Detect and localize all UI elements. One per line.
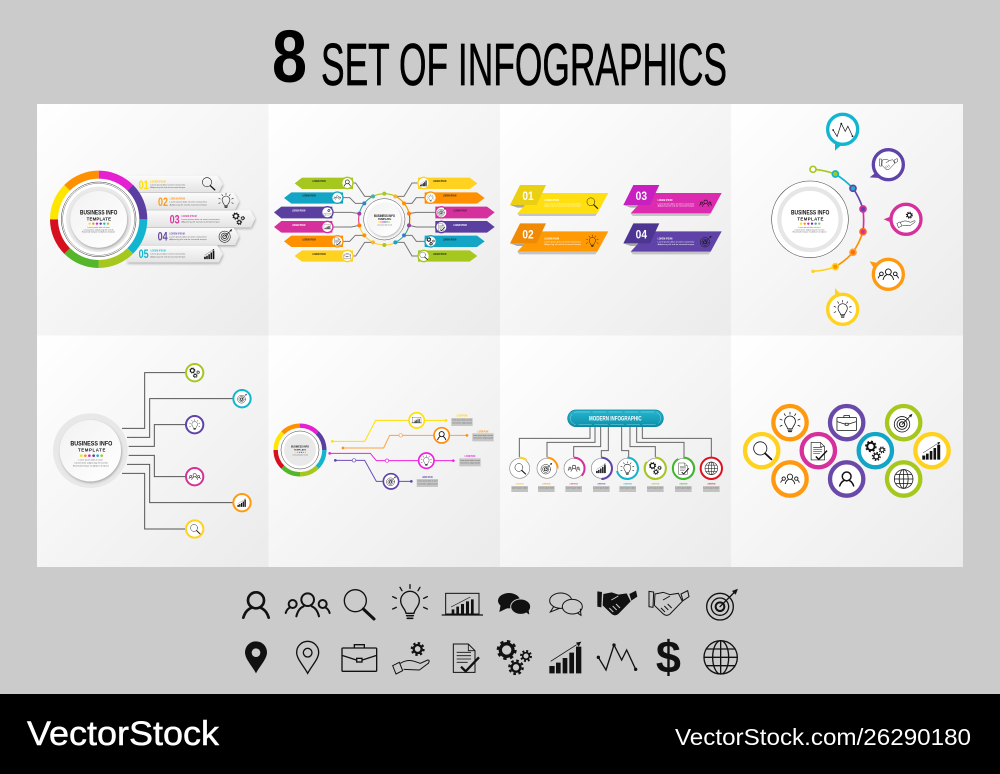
ribbon 02: 02: [522, 227, 534, 241]
node 5 bulb: Lorem ipsum dolor: [620, 487, 636, 490]
ribbon 01: 01: [522, 189, 534, 203]
circle: group: [773, 462, 807, 496]
tab 02: Adipiscing elit sed do eiusmod tempor: [170, 203, 207, 206]
ribbon 04: Lorem ipsum dolor sit amet consectetur: [658, 241, 695, 244]
tab 02: 02: [158, 196, 168, 209]
circle: search: [745, 434, 778, 467]
circle: bars: [915, 434, 949, 467]
node 6 gears: Lorem ipsum dolor: [648, 487, 663, 490]
icon: globe: [704, 641, 737, 674]
tab 05: 05: [139, 248, 149, 261]
tab 02: LOREM IPSUM: [170, 197, 186, 201]
node 1 search: LOREM IPSUM: [516, 484, 524, 486]
node 7 document: [673, 458, 694, 492]
right arrow labels: LOREM IPSUM: [433, 179, 447, 183]
bubble: group: [870, 259, 903, 289]
central hub: Lorem ipsum dolor sit amet: [377, 224, 392, 227]
bubble: zigzag: [828, 114, 858, 151]
title: 8: [272, 15, 307, 98]
tab 03: Lorem ipsum dolor sit amet consectetur: [181, 218, 220, 221]
central badge: TEMPLATE: [78, 447, 105, 452]
icon: lightbulb: [393, 585, 427, 618]
center circle: Lorem ipsum dolor sit amet: [798, 226, 821, 229]
tab 04: LOREM IPSUM: [169, 231, 185, 235]
tab 04: 04: [158, 231, 168, 244]
tab 05: LOREM IPSUM: [150, 249, 166, 253]
node 3 group: [564, 458, 585, 492]
center circle: [772, 181, 848, 258]
right arrow labels: LOREM IPSUM: [453, 208, 467, 212]
node 6 gears: [645, 458, 666, 492]
central badge: Lorem ipsum dolor sit amet: [88, 226, 110, 229]
ribbon 04: 04: [636, 227, 647, 241]
route: orange: [342, 428, 494, 449]
ribbon 01: Adipiscing elit sed do eiusmod tempor: [544, 205, 581, 208]
ribbon 01: [510, 185, 608, 216]
tab 01: [127, 176, 223, 192]
panel: honeycomb of icon circles: [731, 336, 963, 567]
tab 04: Adipiscing elit sed do eiusmod tempor: [169, 238, 207, 241]
ring badge: [266, 416, 334, 484]
tab 04: [127, 228, 239, 245]
ribbon 04: LOREM IPSUM: [658, 236, 673, 240]
panel: hub with twelve arrow labels: [268, 104, 500, 336]
panel: circular ring with five tabs: [35, 104, 268, 336]
central hub: [357, 192, 411, 247]
right arrow labels: LOREM IPSUM: [443, 237, 457, 241]
node 8 globe: Lorem ipsum dolor: [704, 487, 719, 490]
left arrow labels: LOREM IPSUM: [302, 194, 316, 198]
icon: dollar: $: [656, 632, 681, 683]
panel: modern infographic org chart: [500, 336, 732, 567]
icon: target: [707, 589, 738, 620]
icon: gears: [498, 641, 531, 674]
central badge: Consectetur adipiscing elit sed do: [74, 461, 109, 464]
ribbon 02: Lorem ipsum dolor sit amet consectetur: [544, 241, 581, 244]
ring badge: BUSINESS INFO: [291, 444, 310, 448]
route: yellow: Lorem ipsum dolor sit amet: [452, 419, 472, 422]
left arrow labels: LOREM IPSUM: [292, 223, 306, 227]
route: magenta: LOREM IPSUM: [465, 456, 475, 458]
ribbon 02: Adipiscing elit sed do eiusmod tempor: [544, 243, 581, 246]
tab 02: [127, 193, 239, 210]
tab 01: Lorem ipsum dolor sit amet consectetur: [150, 183, 186, 186]
route: purple: Consectetur adipiscing elit: [417, 482, 438, 485]
route: orange: Lorem ipsum dolor sit amet: [473, 434, 493, 437]
circle: user: [830, 462, 863, 496]
tab 03: [127, 210, 255, 227]
header pill: MODERN INFOGRAPHIC: [589, 416, 642, 423]
icon: filled chat: [498, 593, 531, 615]
central badge: [35, 156, 162, 282]
icon: hand with gear: [393, 643, 429, 674]
icon: document check: [453, 644, 479, 672]
icon: briefcase: [342, 645, 377, 671]
panel: colored route lines: [266, 336, 500, 567]
icon: filled pin: [245, 641, 267, 673]
tab 02: Lorem ipsum dolor sit amet consectetur: [170, 201, 207, 204]
central badge: Eiusmod tempor incididunt ut labore: [73, 464, 110, 467]
node 2 target: LOREM IPSUM: [542, 484, 551, 486]
node 2 target: [537, 458, 558, 492]
ribbon 01: LOREM IPSUM: [544, 198, 560, 202]
center circle: Consectetur adipiscing elit sed do: [794, 228, 825, 231]
node 7 document: LOREM IPSUM: [679, 484, 688, 486]
tab 03: Adipiscing elit sed do eiusmod tempor: [181, 221, 220, 224]
icon: person: [243, 592, 269, 618]
tab 01: LOREM IPSUM: [150, 179, 166, 183]
node 8 globe: [701, 458, 722, 492]
footer bar: VectorStock: [27, 715, 220, 753]
tab 03: 03: [170, 213, 180, 226]
ribbon 04: Adipiscing elit sed do eiusmod tempor: [658, 243, 695, 246]
route: orange: LOREM IPSUM: [478, 431, 488, 433]
connector lines: [519, 426, 711, 457]
ribbon 03: [623, 185, 722, 216]
node 4 bars: [591, 458, 612, 492]
right arrow labels: LOREM IPSUM: [453, 223, 467, 227]
central hub: BUSINESS INFO: [374, 213, 395, 218]
node 6 gears: LOREM IPSUM: [651, 484, 660, 486]
node 1 search: [510, 458, 530, 492]
circle: target: [887, 406, 920, 439]
bubble: handshake: [870, 150, 903, 180]
node 8 globe: LOREM IPSUM: [707, 484, 716, 486]
tab 05: Lorem ipsum dolor sit amet consectetur: [150, 253, 186, 256]
ribbon 03: LOREM IPSUM: [658, 198, 673, 202]
ribbon 02: LOREM IPSUM: [544, 236, 560, 240]
route: yellow: [331, 413, 473, 443]
ring badge: Lorem ipsum dolor sit amet: [293, 454, 308, 457]
left arrow labels: [274, 177, 353, 262]
bubble: hand with gear: [884, 204, 921, 234]
node 3 group: Lorem ipsum dolor: [566, 487, 582, 490]
icon: outlined pin: [297, 641, 319, 673]
center circle: TEMPLATE: [797, 216, 823, 221]
node 1 search: Lorem ipsum dolor: [512, 487, 528, 490]
ribbon 01: Lorem ipsum dolor sit amet consectetur: [544, 202, 581, 205]
panel: four numbered ribbons: [500, 104, 732, 336]
icon: magnifier: [344, 590, 374, 619]
node 5 bulb: LOREM IPSUM: [624, 484, 632, 486]
node: search: [186, 520, 203, 538]
connector lines: [122, 373, 233, 529]
node 2 target: Lorem ipsum dolor: [539, 487, 554, 490]
footer bar: VectorStock.com/26290180: [675, 724, 971, 750]
icon: filled handshake: [597, 591, 637, 615]
node: gears: [186, 364, 203, 381]
node 4 bars: LOREM IPSUM: [597, 484, 606, 486]
central badge: Lorem ipsum dolor sit amet: [79, 458, 103, 461]
icon: laptop chart: [442, 593, 483, 615]
route: purple: Lorem ipsum dolor sit amet: [417, 480, 438, 483]
circle: lightbulb: [773, 406, 807, 439]
arc with nodes: [810, 166, 866, 273]
route: yellow: Consectetur adipiscing elit: [452, 421, 472, 424]
left arrow labels: LOREM IPSUM: [312, 179, 326, 183]
circle: briefcase: [830, 406, 863, 439]
icon: outlined chat: [550, 593, 582, 615]
circle: gears: [859, 434, 892, 467]
route: purple: LOREM IPSUM: [422, 477, 433, 479]
tab 03: LOREM IPSUM: [181, 214, 197, 218]
connector lines: [332, 183, 435, 256]
ribbon 03: 03: [636, 189, 647, 203]
node 5 bulb: [617, 458, 638, 492]
node 4 bars: Lorem ipsum dolor: [594, 487, 609, 490]
circle: globe: [887, 462, 920, 496]
node: group: [186, 468, 203, 485]
node 7 document: Lorem ipsum dolor: [676, 487, 691, 490]
route: magenta: Lorem ipsum dolor sit amet: [460, 459, 480, 462]
header pill: [568, 410, 663, 427]
icon: growth bars: [549, 642, 581, 673]
panel: arc timeline with speech bubbles: [731, 104, 963, 336]
right arrow labels: LOREM IPSUM: [433, 252, 447, 256]
route: orange: Consectetur adipiscing elit: [473, 437, 493, 440]
left arrow labels: LOREM IPSUM: [312, 252, 326, 256]
title: SET OF INFOGRAPHICS: [321, 32, 727, 98]
node: lightbulb: [186, 416, 203, 433]
central badge: TEMPLATE: [87, 216, 111, 221]
icon: zigzag: [597, 643, 637, 671]
right arrow labels: [418, 177, 495, 262]
central badge: Eiusmod tempor incididunt ut labore: [82, 231, 116, 234]
title: [272, 15, 727, 98]
left arrow labels: LOREM IPSUM: [302, 237, 316, 241]
icon: group: [286, 593, 330, 616]
left arrow labels: LOREM IPSUM: [292, 208, 306, 212]
tab 04: Lorem ipsum dolor sit amet consectetur: [169, 235, 207, 238]
center circle: BUSINESS INFO: [791, 210, 829, 217]
central badge: Consectetur adipiscing elit sed do: [84, 228, 115, 231]
footer bar: [0, 694, 1000, 774]
ribbon 02: [510, 223, 608, 254]
icon: outlined handshake: [649, 591, 689, 615]
right arrow labels: LOREM IPSUM: [443, 194, 457, 198]
route: purple: [334, 459, 438, 489]
ribbon 03: Adipiscing elit sed do eiusmod tempor: [658, 205, 695, 208]
circle: document: [802, 434, 835, 467]
panel: tree of connector lines: [37, 336, 268, 567]
central hub: TEMPLATE: [378, 217, 392, 221]
node 3 group: LOREM IPSUM: [570, 484, 578, 486]
route: magenta: Consectetur adipiscing elit: [460, 462, 480, 465]
icon legend: [243, 585, 738, 683]
node: bars: [233, 494, 251, 511]
ribbon 04: [623, 223, 722, 254]
ring badge: TEMPLATE: [294, 448, 307, 451]
node: target: [233, 390, 251, 407]
route: magenta: [328, 452, 481, 468]
tab 05: [127, 245, 223, 262]
tab 05: Adipiscing elit sed do eiusmod tempor: [150, 255, 186, 258]
center circle: Eiusmod tempor incididunt ut labore: [793, 231, 828, 234]
tab 01: Adipiscing elit sed do eiusmod tempor: [150, 186, 186, 189]
tab 01: 01: [139, 179, 149, 192]
central badge: [53, 413, 128, 488]
bubble: lightbulb: [828, 288, 858, 324]
route: yellow: LOREM IPSUM: [457, 416, 467, 418]
ribbon 03: Lorem ipsum dolor sit amet consectetur: [658, 202, 695, 205]
central badge: BUSINESS INFO: [70, 441, 112, 448]
central badge: BUSINESS INFO: [80, 210, 117, 217]
